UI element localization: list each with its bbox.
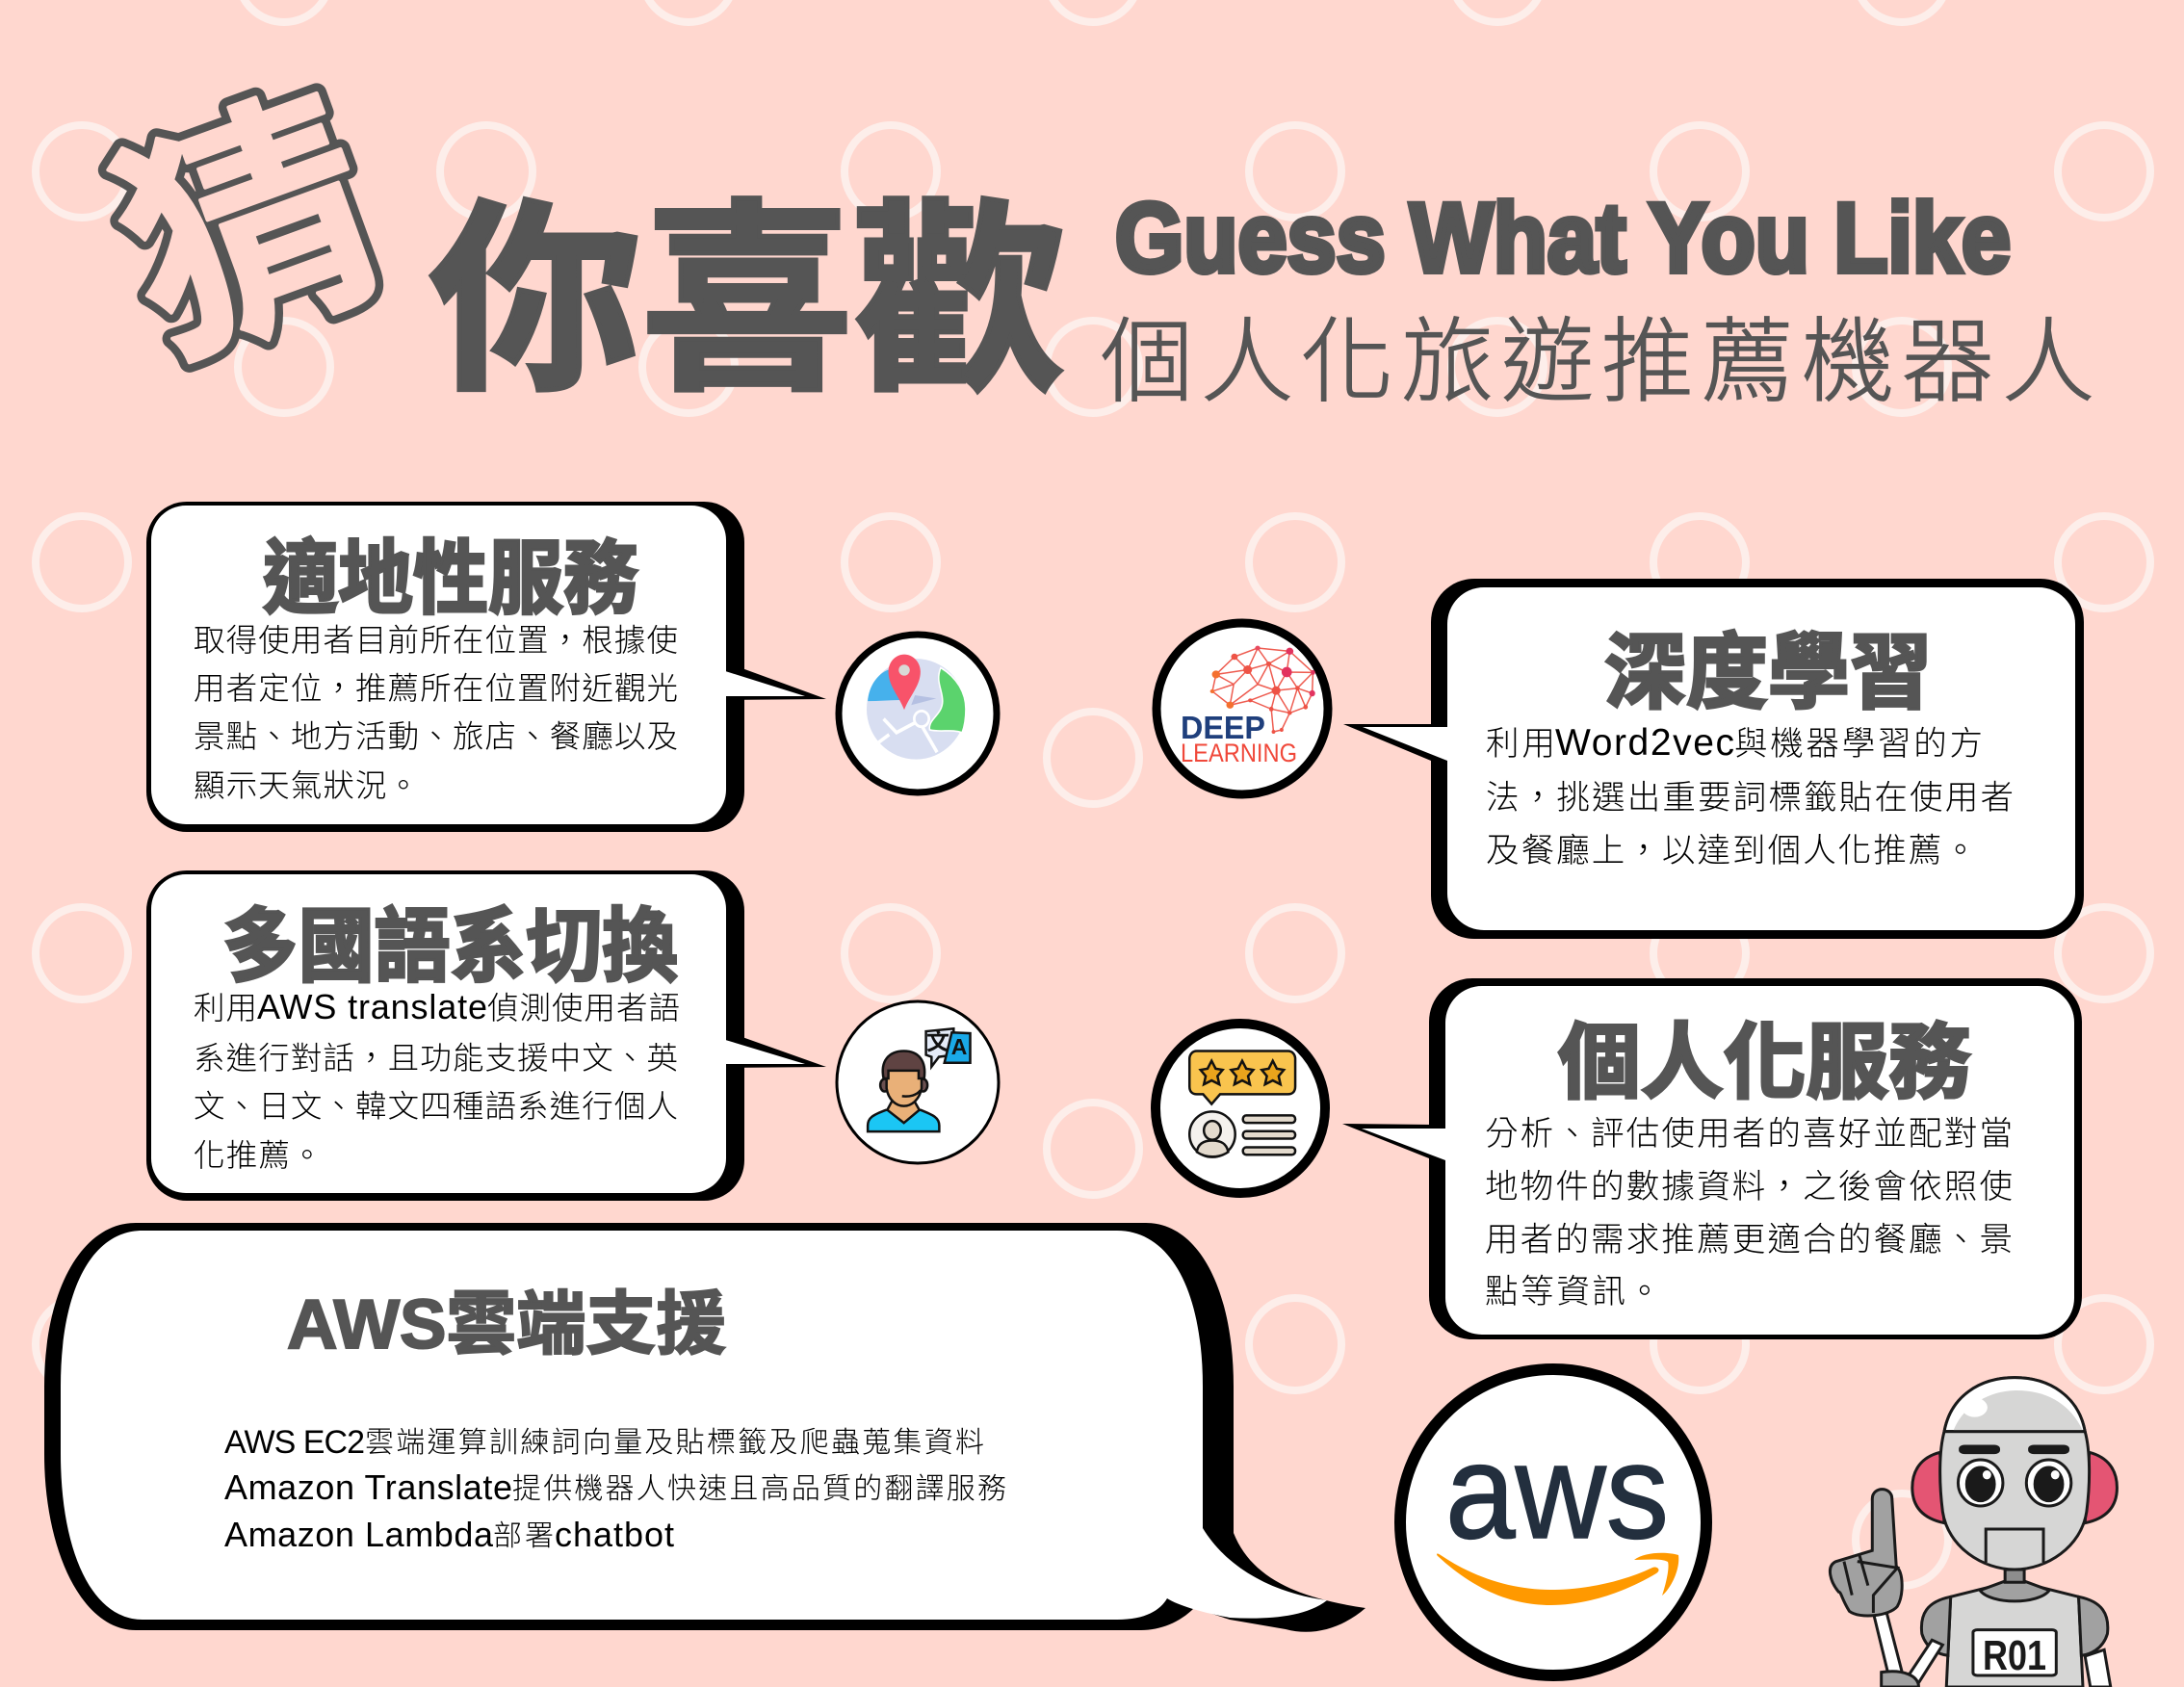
body text: 偵測使用者語: [487, 991, 680, 1025]
subtitle: 個人化旅遊推薦機器人: 個人化旅遊推薦機器人: [1101, 311, 2094, 414]
body text: 利用: [194, 991, 257, 1025]
subtitle: Guess What You Like: Guess What You Like: [1115, 183, 2011, 293]
title: 猜 outlined rotated character: 猜: [88, 61, 411, 402]
heading: 個人化服務: [1558, 1017, 1971, 1109]
body text: Amazon Translate: [224, 1467, 512, 1507]
heading: 深度學習: [1604, 627, 1932, 719]
robot mouth: [1986, 1529, 2043, 1563]
body text: 文、日文、韓文四種語系進行個人: [194, 1089, 678, 1124]
body text: Amazon Lambda: [224, 1515, 494, 1554]
icon: translator agent: [837, 1001, 999, 1163]
panel: 深度學習: [1343, 579, 2084, 939]
amazon smile: [1437, 1553, 1678, 1605]
body text: 化推薦。: [194, 1138, 323, 1173]
body text: 用者的需求推薦更適合的餐廳、景: [1485, 1222, 2013, 1259]
robot mascot: [1830, 1378, 2117, 1687]
glyph 文: 文: [926, 1028, 949, 1055]
panel: 個人化服務: [1342, 978, 2082, 1339]
body text: 分析、評估使用者的喜好並配對當: [1485, 1116, 2013, 1153]
heading: 多國語系切換: [222, 901, 678, 992]
icon: star rating review: [1156, 1024, 1325, 1193]
body text: [224, 1424, 1006, 1554]
body text: 點等資訊。: [1485, 1274, 1661, 1311]
body text: 用者定位，推薦所在位置附近觀光: [194, 671, 678, 706]
body text: 與機器學習的方: [1734, 726, 1983, 763]
logo text DEEP: DEEP: [1181, 710, 1265, 745]
robot eyes: [1958, 1460, 2003, 1506]
logo text LEARNING: LEARNING: [1181, 739, 1297, 767]
title: 猜 outlined rotated character: 猜: [88, 61, 411, 402]
body text: [194, 987, 680, 1173]
icon: location map: [839, 635, 997, 792]
body text: [1485, 1116, 2013, 1311]
body text: 法，挑選出重要詞標籤貼在使用者: [1486, 780, 2014, 817]
body text: [1486, 722, 2014, 869]
robot arm and hand: [1873, 1613, 1904, 1678]
body text: chatbot: [555, 1515, 674, 1554]
body text: 地物件的數據資料，之後會依照使: [1485, 1169, 2013, 1206]
robot torso: [1946, 1581, 2083, 1687]
panel: 多國語系切換: [146, 870, 826, 1201]
nameplate text: R01: [1983, 1632, 2046, 1679]
body text: 景點、地方活動、旅店、餐廳以及: [194, 719, 678, 754]
body text: 提供機器人快速且高品質的翻譯服務: [512, 1473, 1006, 1505]
body text: 及餐廳上，以達到個人化推薦。: [1486, 833, 1977, 869]
body text: 系進行對話，且功能支援中文、英: [194, 1041, 678, 1076]
heading: AWS雲端支援: [287, 1286, 726, 1363]
heading: 適地性服務: [263, 533, 638, 624]
robot ears: [1912, 1452, 2117, 1523]
body text: AWS EC2: [224, 1424, 365, 1461]
panel: AWS雲端支援: [44, 1223, 1365, 1632]
body text: Word2vec: [1555, 722, 1734, 764]
panel: 適地性服務: [146, 502, 826, 832]
robot nameplate: [1973, 1630, 2056, 1675]
robot shoulders: [1921, 1596, 2108, 1655]
title: 你喜歡: 你喜歡: [429, 187, 1065, 415]
body text: [194, 623, 678, 803]
icon: deep learning logo: [1157, 623, 1328, 794]
body text: 利用: [1486, 726, 1555, 763]
icon: AWS logo: [1400, 1369, 1706, 1675]
robot head: [1940, 1378, 2090, 1570]
glyph A: A: [951, 1034, 967, 1059]
body text: 部署: [493, 1520, 554, 1552]
aws wordmark: aws: [1445, 1415, 1669, 1567]
body text: AWS translate: [257, 987, 487, 1026]
body text: 取得使用者目前所在位置，根據使: [194, 623, 678, 658]
body text: 雲端運算訓練詞向量及貼標籤及爬蟲蒐集資料: [365, 1427, 984, 1459]
body text: 顯示天氣狀況。: [194, 768, 419, 803]
